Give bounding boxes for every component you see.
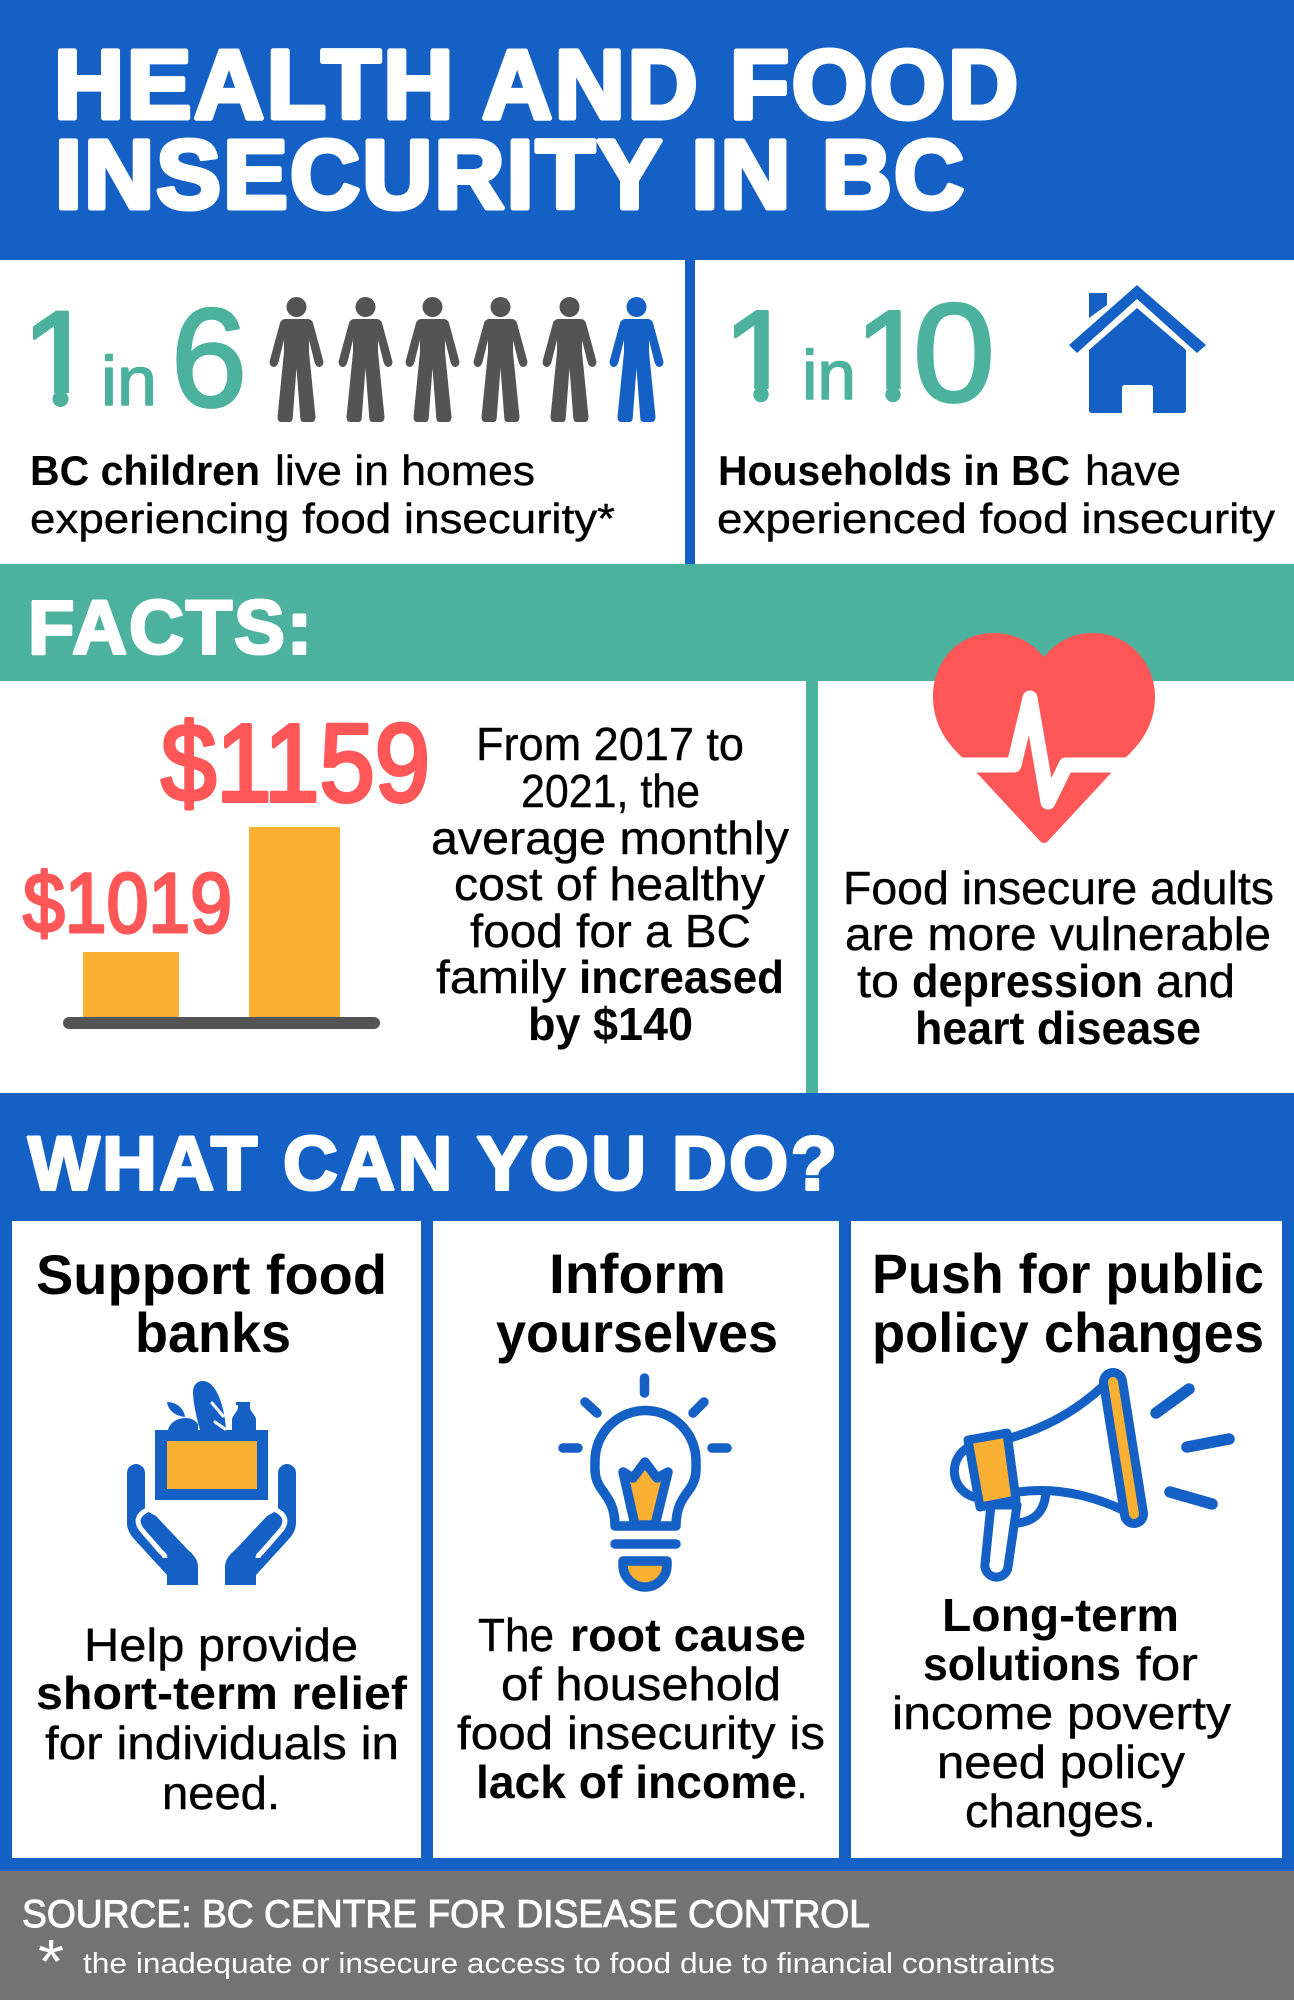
panel: 1 in 10 households: [718, 285, 1276, 542]
text: cost increase: average monthly: [431, 812, 789, 864]
card heading: Inform: [549, 1242, 726, 1305]
source line: SOURCE: BC CENTRE FOR DISEASE CONTROL: [22, 1893, 870, 1936]
footer: [0, 1871, 1294, 2000]
text: health risks: and: [1156, 955, 1235, 1007]
stat: 1 in 6: in: [101, 342, 157, 420]
card heading: policy changes: [872, 1301, 1264, 1364]
text: households: [717, 447, 1275, 542]
stat: 1 in 6: [33, 306, 242, 409]
stat: 1 in 10: in: [802, 336, 856, 414]
title: [54, 30, 1018, 229]
card: push for policy: [851, 1221, 1282, 1858]
panel: 1 in 6 children: [32, 297, 664, 542]
text: health risks: are more vulnerable: [845, 908, 1271, 960]
text: health risks: heart disease: [915, 1002, 1201, 1054]
card text: [892, 1589, 1231, 1837]
card text: solutions: [923, 1638, 1121, 1690]
text: cost increase: increased: [579, 951, 784, 1003]
panel: cost chart: [23, 702, 789, 1050]
card text: Long-term: [942, 1589, 1179, 1641]
card: inform yourselves: [433, 1221, 839, 1858]
card text: need policy: [937, 1736, 1185, 1788]
title banner: [0, 0, 1294, 260]
divider: facts panels: [806, 681, 818, 1094]
text: cost increase: by $140: [528, 998, 693, 1050]
heading: facts: FACTS:: [28, 586, 312, 670]
card text: changes.: [965, 1785, 1156, 1837]
card text: short-term relief: [36, 1667, 408, 1719]
stat: 1 in 10: 1: [723, 283, 795, 429]
card heading: Push for public: [872, 1242, 1264, 1305]
card heading: banks: [135, 1301, 291, 1364]
text: households: experienced food insecurity: [717, 495, 1275, 542]
icon: six people, one highlighted: [270, 297, 663, 422]
card heading: [496, 1242, 778, 1364]
icon: heart with pulse: [933, 633, 1155, 843]
text: health risks: [843, 862, 1274, 1054]
card text: for: [1136, 1638, 1198, 1690]
text: cost increase: family: [436, 951, 566, 1003]
section: what can you do: [0, 1093, 1294, 1871]
stat: 1 in 10: 1: [855, 283, 927, 429]
card heading: [36, 1243, 387, 1364]
card heading: Support food: [36, 1243, 387, 1306]
text: health risks: Food insecure adults: [843, 862, 1274, 914]
card text: need.: [162, 1767, 280, 1819]
icon: hands holding food box: [127, 1381, 296, 1585]
text: BC children: BC children: [30, 447, 260, 494]
stat: 1 in 10: 0: [913, 274, 995, 431]
card text: [36, 1619, 408, 1819]
text: cost increase: [431, 718, 789, 1050]
icon: light bulb: [563, 1378, 727, 1587]
text: BC children: experiencing food insecurity*: [30, 495, 615, 542]
card: support food banks: [12, 1221, 421, 1858]
text: cost increase: food for a BC: [470, 905, 751, 957]
text: cost increase: 2021, the: [521, 765, 700, 817]
facts banner: [0, 564, 1294, 681]
card text: [457, 1609, 825, 1808]
card text: lack of income: [476, 1756, 797, 1808]
text: BC children: [30, 447, 615, 542]
text: households: have: [1085, 447, 1181, 494]
bar: 2021: [249, 827, 340, 1018]
card text: Help provide: [84, 1619, 358, 1671]
card text: root cause: [570, 1609, 806, 1661]
card text: food insecurity is: [457, 1707, 825, 1759]
text: households: Households in BC: [718, 447, 1070, 494]
title: INSECURITY IN BC: [55, 120, 964, 229]
card text: income poverty: [892, 1687, 1231, 1739]
value: $1159: $1159: [161, 702, 430, 825]
text: cost increase: cost of healthy: [454, 858, 765, 910]
asterisk: *: [38, 1928, 64, 1997]
value: $1019: $1019: [23, 856, 232, 950]
icon: megaphone: [954, 1382, 1229, 1577]
bar: 2017: [83, 952, 179, 1018]
panel: health risks: [843, 633, 1274, 1054]
text: BC children: live in homes: [275, 447, 535, 494]
stat: 1 in 10: [734, 302, 991, 404]
stat: 1 in 6: 6: [171, 279, 247, 436]
stat: 1 in 6: 1: [22, 283, 97, 434]
footnote: the inadequate or insecure access to food due to financial constraints: [83, 1948, 1055, 1980]
icon: house: [1069, 285, 1206, 413]
card heading: yourselves: [496, 1301, 778, 1364]
card text: The: [478, 1609, 554, 1661]
divider: top panels: [685, 260, 695, 564]
card text: of household: [501, 1658, 781, 1710]
heading: what can you do: WHAT CAN YOU DO?: [28, 1122, 837, 1206]
card heading: [872, 1242, 1264, 1364]
bar chart: food cost: [23, 702, 430, 1029]
text: health risks: depression: [912, 955, 1143, 1007]
text: cost increase: From 2017 to: [476, 718, 744, 770]
text: health risks: to: [857, 955, 899, 1007]
chart baseline: [63, 1017, 380, 1029]
card text: for individuals in: [45, 1717, 399, 1769]
card text: .: [797, 1756, 807, 1808]
title: HEALTH AND FOOD: [54, 30, 1018, 139]
